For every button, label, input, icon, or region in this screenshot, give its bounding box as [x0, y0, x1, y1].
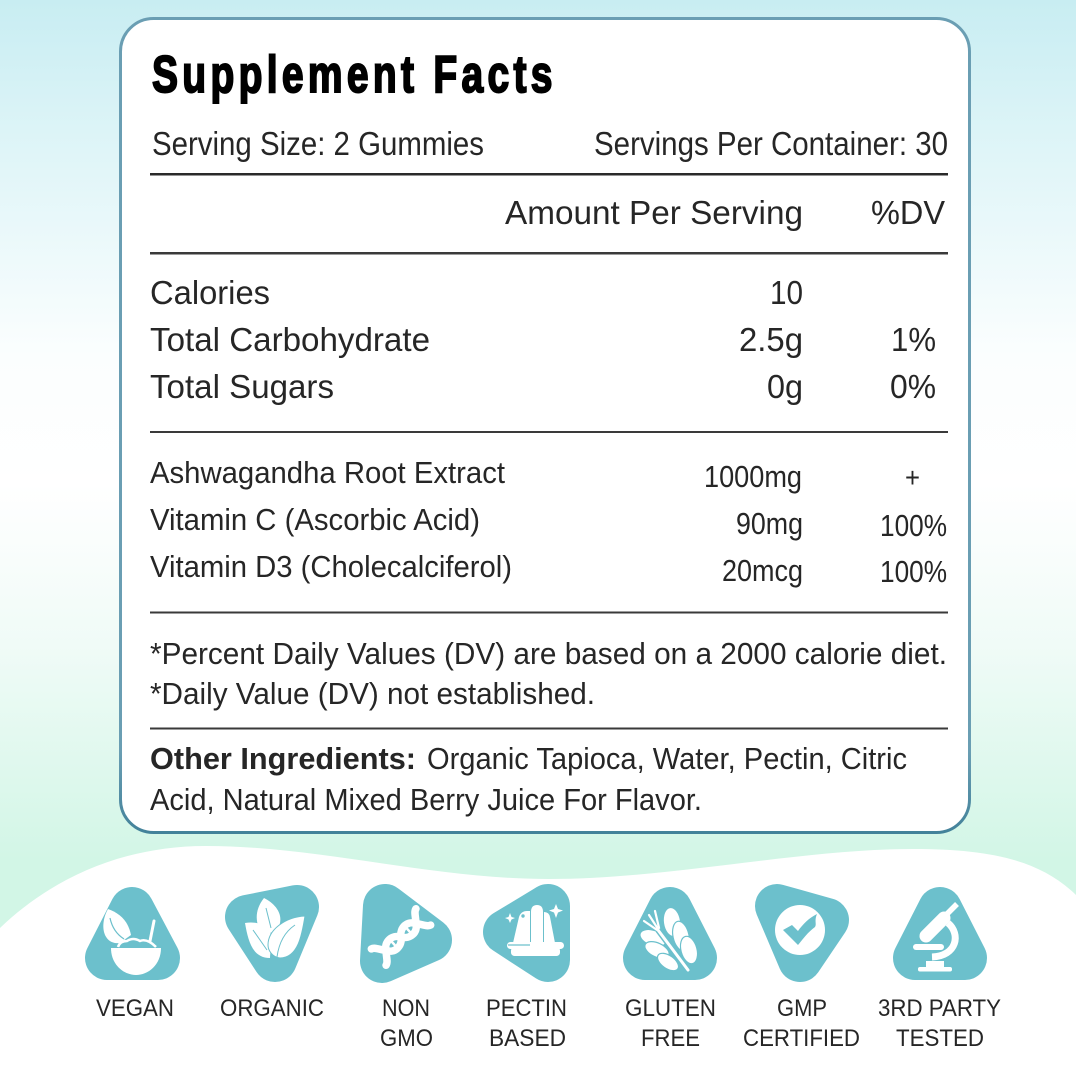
- label: pectin based: [486, 995, 567, 1052]
- row: calories: 10: [770, 274, 803, 311]
- row: ashwagandha: 1000mg: [704, 459, 802, 494]
- footnote: daily value not established: *Daily Value (DV) not established.: [150, 676, 595, 711]
- row: total sugars: [150, 368, 936, 405]
- label: gmp certified: CERTIFIED: [743, 1025, 860, 1052]
- label: pectin based: PECTIN: [486, 995, 567, 1022]
- label: non gmo: [380, 995, 433, 1052]
- row: total carbohydrate: Total Carbohydrate: [150, 321, 430, 358]
- column header: amount per serving: Amount Per Serving: [505, 194, 803, 231]
- panel: supplement facts card: [120, 18, 970, 832]
- icon: dna helix: [371, 906, 431, 965]
- row: vitamin d3: 100%: [880, 554, 947, 589]
- label: gluten free: GLUTEN: [625, 995, 716, 1022]
- label: vegan: VEGAN: [96, 995, 174, 1022]
- row: total sugars: 0%: [890, 368, 936, 405]
- row: total carbohydrate: 2.5g: [739, 321, 803, 358]
- label: pectin based: BASED: [489, 1025, 566, 1052]
- column header: percent daily value: %DV: [871, 194, 945, 231]
- label: gmp certified: GMP: [777, 995, 827, 1022]
- label: 3rd party tested: [878, 995, 1001, 1052]
- icon: gluten free wheat: [638, 907, 700, 974]
- row: vitamin d3: Vitamin D3 (Cholecalciferol): [150, 549, 512, 584]
- other ingredients: Other Ingredients:: [150, 741, 416, 776]
- label: 3rd party tested: TESTED: [896, 1025, 984, 1052]
- row: calories: [150, 274, 803, 311]
- label: 3rd party tested: 3RD PARTY: [878, 995, 1001, 1022]
- icon: pectin jelly mold: [505, 904, 564, 960]
- row: vitamin c: 100%: [880, 508, 947, 543]
- servings per container: Servings Per Container: 30: [594, 125, 948, 162]
- serving size: Serving Size: 2 Gummies: [152, 125, 484, 162]
- row: vitamin d3: 20mcg: [722, 553, 803, 588]
- row: vitamin c: [150, 502, 947, 543]
- icon: gmp certified check: [775, 905, 827, 960]
- row: vitamin c: 90mg: [736, 506, 803, 541]
- row: total sugars: 0g: [767, 368, 803, 405]
- label: gluten free: FREE: [641, 1025, 700, 1052]
- row: ashwagandha: [150, 455, 920, 494]
- row: total carbohydrate: [150, 321, 936, 358]
- row: ashwagandha: +: [905, 462, 920, 493]
- white wave footer: [0, 846, 1076, 1076]
- row: vitamin c: Vitamin C (Ascorbic Acid): [150, 502, 480, 537]
- row: calories: Calories: [150, 274, 270, 311]
- title: Supplement Facts: [152, 44, 552, 103]
- other ingredients: Organic Tapioca, Water, Pectin, Citric: [427, 741, 907, 776]
- other ingredients: Acid, Natural Mixed Berry Juice For Flavor.: [150, 782, 702, 817]
- row: vitamin d3: [150, 549, 947, 589]
- label: gluten free: [625, 995, 716, 1052]
- label: non gmo: GMO: [380, 1025, 433, 1052]
- label: gmp certified: [743, 995, 860, 1052]
- other ingredients: [150, 741, 907, 817]
- row: ashwagandha: Ashwagandha Root Extract: [150, 455, 505, 490]
- icon: third party microscope: [915, 904, 965, 972]
- icon: organic: [245, 898, 305, 960]
- icon: vegan: [103, 909, 161, 975]
- row: total carbohydrate: 1%: [891, 321, 936, 358]
- label: organic: ORGANIC: [220, 995, 324, 1022]
- label: non gmo: NON: [382, 995, 430, 1022]
- row: total sugars: Total Sugars: [150, 368, 334, 405]
- footnote: percent daily values: *Percent Daily Values (DV) are based on a 2000 calorie diet.: [150, 636, 947, 671]
